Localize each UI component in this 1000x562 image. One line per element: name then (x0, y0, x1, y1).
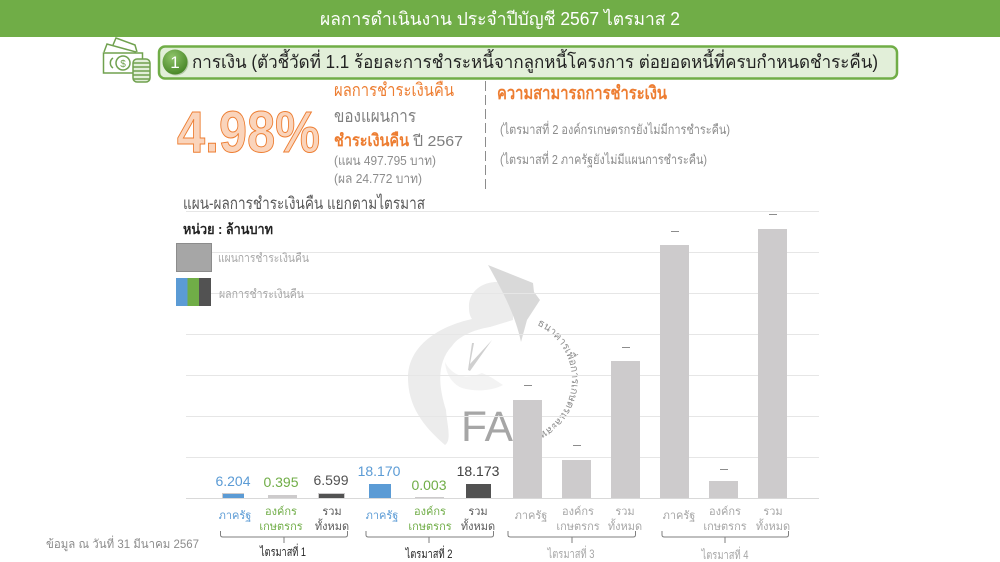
data date note: ข้อมูล ณ วันที่ 31 มีนาคม 2567 (46, 535, 199, 552)
category labels: องค์กร (709, 505, 741, 518)
icon: money and coins: $ (120, 59, 126, 70)
category labels: รวม (468, 506, 488, 518)
repayment result description: ปี 2567 (412, 133, 463, 150)
category labels (219, 505, 790, 533)
title banner: ผลการดำเนินงาน ประจำปีบัญชี 2567 ไตรมาส 2 (320, 8, 680, 29)
category labels: ภาครัฐ (663, 510, 695, 522)
repayment result description: ของแผนการ (334, 106, 416, 126)
repayment result description: ผลการชำระเงินคืน (334, 80, 454, 100)
chart title: แผน-ผลการชำระเงินคืน แยกตามไตรมาส (183, 193, 425, 213)
legend: แผนการชำระเงินคืน (218, 251, 309, 265)
category labels: ทั้งหมด (756, 518, 790, 533)
heading text: การเงิน (ตัวชี้วัดที่ 1.1 ร้อยละการชำระหนี้จากลูกหนี้โครงการ ต่อยอดหนี้ที่ครบกำหนดชำระคืน) (192, 49, 878, 73)
quarter brackets (220, 531, 788, 543)
repayment result description: ชำระเงินคืน (334, 130, 409, 150)
value labels: 6.599 (313, 472, 349, 488)
category labels: ทั้งหมด (461, 518, 495, 533)
section heading bar (159, 46, 897, 78)
quarter labels: ไตรมาสที่ 3 (547, 545, 595, 561)
value labels: 0.003 (411, 477, 447, 493)
ability to pay panel: (ไตรมาสที่ 2 องค์กรเกษตรกรยังไม่มีการชำระคืน) (500, 121, 730, 137)
quarter labels: ไตรมาสที่ 1 (259, 543, 306, 559)
icon: money and coins (104, 38, 150, 82)
category labels: ภาครัฐ (219, 510, 251, 522)
quarter labels (259, 543, 749, 562)
watermark logo (408, 265, 578, 451)
category labels: องค์กร (562, 505, 594, 518)
quarter labels: ไตรมาสที่ 4 (701, 546, 749, 562)
value labels: 6.204 (215, 473, 251, 489)
category labels: รวม (763, 506, 783, 518)
ability to pay panel: (ไตรมาสที่ 2 ภาครัฐยังไม่มีแผนการชำระคืน) (500, 151, 707, 168)
category labels: องค์กร (265, 505, 297, 518)
bar chart (215, 214, 790, 533)
category labels: เกษตรกร (259, 521, 303, 533)
actual bars (223, 494, 244, 498)
number badge: 1 (170, 53, 180, 72)
big percentage: 4.98% (177, 100, 320, 165)
category labels: เกษตรกร (408, 521, 452, 533)
category labels: ทั้งหมด (315, 518, 349, 533)
repayment result description: (ผล 24.772 บาท) (334, 171, 422, 186)
value labels: 18.170 (358, 463, 401, 479)
plan bars (222, 229, 787, 498)
category labels: ภาครัฐ (366, 510, 398, 522)
value labels: 18.173 (457, 463, 500, 479)
category labels: ภาครัฐ (515, 510, 547, 522)
category labels: ทั้งหมด (608, 518, 642, 533)
number badge (162, 50, 188, 76)
category labels: เกษตรกร (703, 521, 747, 533)
category labels: รวม (615, 506, 635, 518)
ability to pay panel (497, 83, 730, 168)
unit label: หน่วย : ล้านบาท (183, 221, 273, 237)
category labels: รวม (322, 506, 342, 518)
category labels: เกษตรกร (556, 521, 600, 533)
legend (176, 244, 309, 306)
repayment result description (334, 80, 463, 186)
category labels: องค์กร (414, 505, 446, 518)
repayment result description: (แผน 497.795 บาท) (334, 153, 436, 168)
empty value dashes (524, 214, 777, 470)
value labels (215, 463, 500, 493)
watermark logo: FA (461, 403, 513, 451)
quarter labels: ไตรมาสที่ 2 (405, 545, 453, 561)
legend: ผลการชำระเงินคืน (219, 287, 304, 301)
title banner (0, 0, 1000, 37)
value labels: 0.395 (263, 474, 299, 490)
ability to pay panel: ความสามารถการชำระเงิน (497, 83, 668, 103)
watermark logo: ธนาคารเพื่อการเกษตรและสหกรณ์ (538, 320, 578, 438)
